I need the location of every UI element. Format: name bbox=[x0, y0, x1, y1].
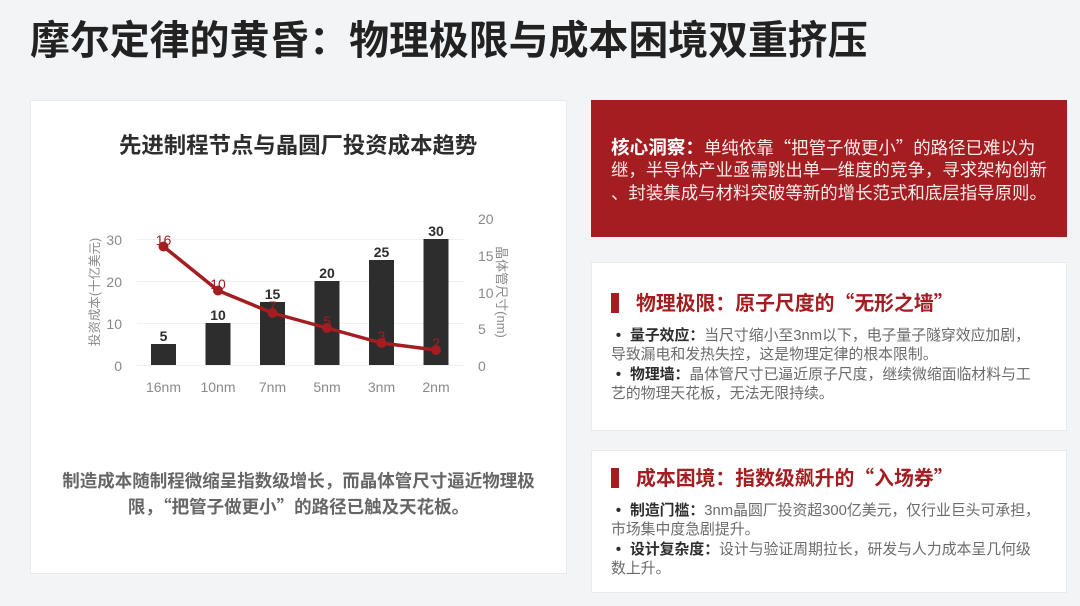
x axis labels: 5nm bbox=[313, 379, 341, 395]
bar values: 15 bbox=[265, 286, 280, 302]
core insight text: 核心洞察：单纯依靠“把管子做更小”的路径已难以为 bbox=[611, 135, 1035, 160]
right axis: 15 bbox=[478, 248, 494, 264]
chart caption: 限，“把管子做更小”的路径已触及天花板。 bbox=[128, 494, 469, 519]
x axis labels bbox=[146, 379, 450, 395]
cost dilemma body: 数上升。 bbox=[611, 561, 670, 577]
panel: core insight bbox=[591, 100, 1067, 237]
physical limits body bbox=[611, 327, 1031, 402]
x axis labels: 7nm bbox=[259, 379, 286, 395]
line series: 7 bbox=[269, 298, 277, 314]
cost dilemma body: 制造门槛：3nm晶圆厂投资超300亿美元，仅行业巨头可承担， bbox=[630, 503, 1040, 519]
chart heading: 先进制程节点与晶圆厂投资成本趋势 bbox=[119, 133, 477, 158]
bar values: 5 bbox=[160, 328, 168, 344]
panel: chart bbox=[30, 100, 567, 574]
core insight text: 、封装集成与材料突破等新的增长范式和底层指导原则。 bbox=[611, 183, 1047, 203]
bar values bbox=[160, 223, 444, 344]
right axis: 10 bbox=[478, 285, 494, 301]
left axis: 投资成本(十亿美元) bbox=[87, 238, 102, 346]
x axis labels: 2nm bbox=[422, 379, 450, 395]
bars bbox=[151, 239, 448, 365]
core insight text bbox=[611, 135, 1047, 203]
physical limits heading: 物理极限：原子尺度的“无形之墙” bbox=[636, 287, 954, 316]
bar values: 25 bbox=[374, 244, 389, 260]
panel: physical limits bbox=[591, 262, 1067, 431]
line series: 2 bbox=[432, 335, 440, 351]
physical limits body: 导致漏电和发热失控，这是物理定律的根本限制。 bbox=[611, 347, 938, 363]
line series: 3 bbox=[378, 328, 386, 344]
chart caption bbox=[62, 471, 535, 519]
right axis: 0 bbox=[478, 358, 486, 374]
left axis bbox=[87, 232, 122, 374]
x axis labels: 3nm bbox=[368, 379, 395, 395]
cost dilemma body: 市场集中度急剧提升。 bbox=[611, 522, 759, 538]
physical limits body: • bbox=[616, 328, 621, 344]
left axis: 30 bbox=[106, 232, 122, 248]
left axis: 0 bbox=[114, 358, 122, 374]
cost dilemma body: • bbox=[616, 542, 621, 558]
line series: 5 bbox=[323, 313, 331, 329]
line series bbox=[156, 232, 441, 355]
bar values: 30 bbox=[428, 223, 444, 239]
right axis bbox=[478, 211, 509, 374]
right axis: 5 bbox=[478, 321, 486, 337]
line series: 10 bbox=[210, 276, 226, 292]
right axis: 20 bbox=[478, 211, 494, 227]
physical limits accent bbox=[611, 293, 619, 313]
title: 摩尔定律的黄昏：物理极限与成本困境双重挤压 bbox=[30, 19, 868, 63]
left axis: 20 bbox=[106, 274, 122, 290]
physical limits body: 量子效应：当尺寸缩小至3nm以下，电子量子隧穿效应加剧， bbox=[630, 328, 1030, 344]
cost dilemma body: 设计复杂度：设计与验证周期拉长，研发与人力成本呈几何级 bbox=[630, 542, 1031, 558]
x axis labels: 16nm bbox=[146, 379, 181, 395]
line series: 16 bbox=[156, 232, 171, 248]
bar values: 10 bbox=[210, 307, 226, 323]
left axis: 10 bbox=[106, 316, 122, 332]
right axis: 晶体管尺寸(nm) bbox=[494, 246, 509, 338]
cost dilemma body bbox=[611, 502, 1040, 577]
x axis labels: 10nm bbox=[200, 379, 236, 395]
physical limits body: 物理墙：晶体管尺寸已逼近原子尺度，继续微缩面临材料与工 bbox=[630, 366, 1031, 382]
cost dilemma body: • bbox=[616, 503, 621, 519]
cost dilemma accent bbox=[611, 468, 619, 488]
chart caption: 制造成本随制程微缩呈指数级增长，而晶体管尺寸逼近物理极 bbox=[62, 471, 535, 491]
bar values: 20 bbox=[319, 265, 335, 281]
physical limits body: • bbox=[616, 366, 621, 382]
panel: cost dilemma bbox=[591, 450, 1067, 593]
physical limits body: 艺的物理天花板，无法无限持续。 bbox=[611, 386, 834, 402]
core insight text: 继，半导体产业亟需跳出单一维度的竞争，寻求架构创新 bbox=[611, 160, 1047, 180]
cost dilemma heading: 成本困境：指数级飙升的“入场券” bbox=[636, 462, 954, 491]
